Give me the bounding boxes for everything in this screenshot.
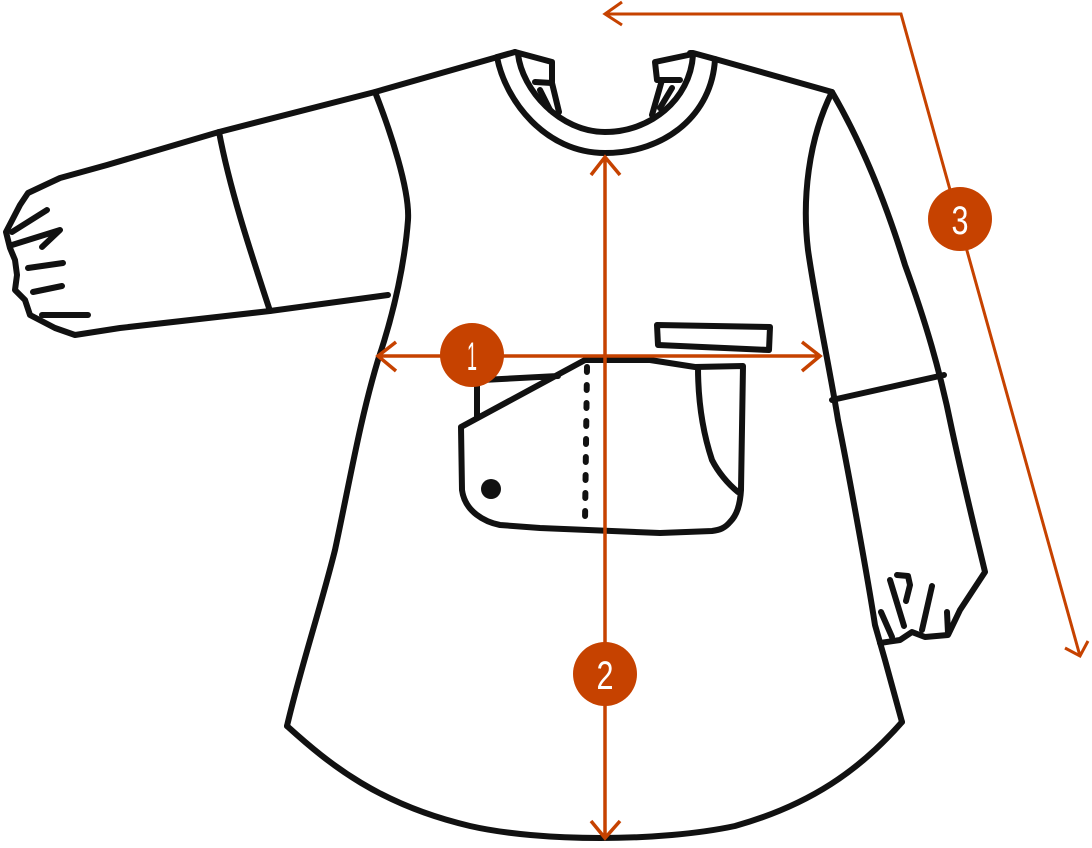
collar outer [497,53,715,153]
pocket inner curve [698,367,738,492]
badge 1 [440,323,504,387]
collar inner lines [540,80,672,115]
right collar flap [655,54,693,80]
measurement 3: sleeve arrow [605,2,1088,656]
left sleeve seam [219,132,270,311]
right cuff gathers [881,575,948,637]
right body side [806,92,902,722]
badge 2 [573,642,637,706]
right shoulder and right sleeve [715,59,985,643]
chest pocket [657,325,770,350]
hem [287,722,902,838]
measurement 2: length arrow [591,157,620,838]
measurement 1: width arrow [378,342,820,371]
left cuff gathers [12,210,88,315]
right sleeve seam [832,375,944,400]
icon: pocket button [481,479,501,499]
collar inner band [518,54,693,132]
badge 1: 1 [467,335,477,379]
badge 2: 2 [596,654,614,698]
left body side [287,92,408,726]
front pocket [461,360,743,533]
left collar flap [515,52,552,83]
pocket stitching [585,367,587,522]
badge 3 [928,187,992,251]
left shoulder and left sleeve outline [6,52,515,335]
badge 3: 3 [952,199,968,243]
